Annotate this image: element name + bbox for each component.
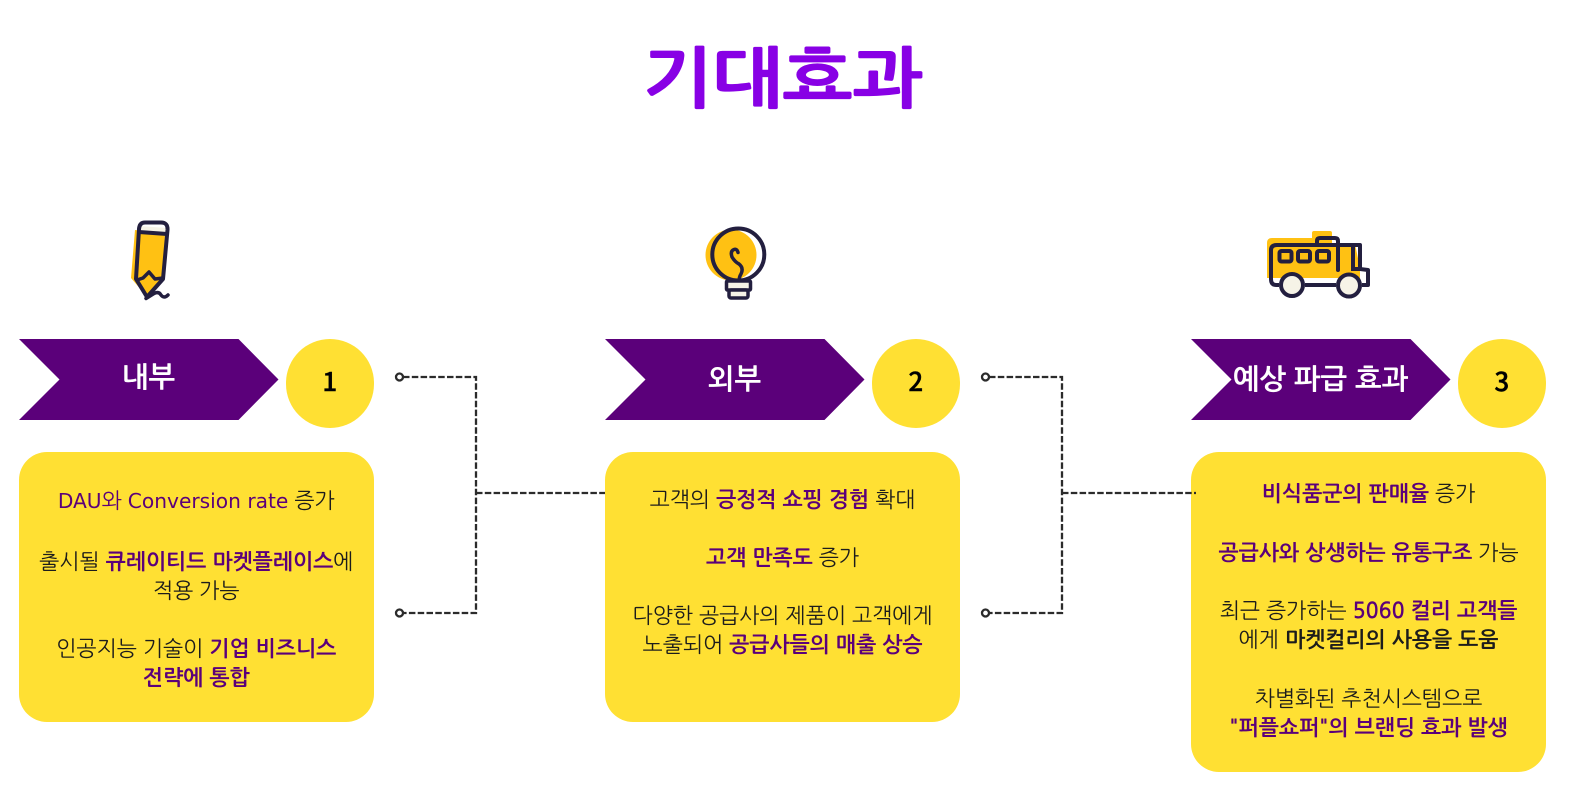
panel: 내부 [19,452,374,722]
title: 기대효과 [643,46,922,111]
text: DAU: DAU와 Conversion rate 증가 [58,489,335,513]
text: 공급사 매출: 다양한 공급사의 제품이 고객에게 [632,606,933,627]
text: 큐레이티드: 적용 가능 [153,581,240,602]
arrow banner: 외부 [605,339,864,420]
badge 2 [872,339,960,428]
panel: 예상 파급 효과 [1191,452,1546,772]
text: 큐레이티드 [39,551,353,602]
text: 공급사 매출 [632,605,933,656]
badge 3 [1458,339,1546,428]
text: 쇼핑 경험: 고객의 긍정적 쇼핑 경험 확대 [650,490,915,511]
badge 3: 3 [1494,362,1509,399]
arrow banner: 내부 [19,339,278,420]
arrow banner: 예상 파급 효과 [1191,339,1450,420]
text: 5060 [1220,600,1517,651]
text: 추천시스템: "퍼플쇼퍼"의 브랜딩 효과 발생 [1229,718,1508,739]
text: 추천시스템 [1229,688,1508,739]
text: 만족도: 고객 만족도 증가 [706,548,859,569]
text: 추천시스템: 차별화된 추천시스템으로 [1255,689,1482,710]
connector: 1 to 2 [394,372,605,618]
badge 2: 2 [908,362,923,399]
badge 1 [286,339,374,428]
text: 5060: 최근 증가하는 5060 컬리 고객들 [1220,601,1517,622]
panel: 외부 [605,452,960,722]
text: 인공지능: 인공지능 기술이 기업 비즈니스 [56,639,336,660]
text: 인공지능: 전략에 통합 [143,668,250,689]
text: 인공지능 [56,638,336,689]
label: 예상 파급 효과: 예상 파급 효과 [1233,366,1408,394]
label: 외부: 외부 [708,366,761,394]
label: 내부: 내부 [122,364,175,392]
text: 비식품군: 비식품군의 판매율 증가 [1262,484,1475,505]
icon: light bulb [706,226,766,300]
text: 큐레이티드: 출시될 큐레이티드 마켓플레이스에 [39,552,353,573]
icon: truck [1267,231,1370,298]
connector: 2 to 3 [980,372,1196,618]
badge 1: 1 [322,362,337,399]
text: 유통구조: 공급사와 상생하는 유통구조 가능 [1218,543,1519,564]
text: 5060: 에게 마켓컬리의 사용을 도움 [1239,630,1498,651]
icon: pencil [131,220,170,300]
text: 공급사 매출: 노출되어 공급사들의 매출 상승 [643,635,923,656]
